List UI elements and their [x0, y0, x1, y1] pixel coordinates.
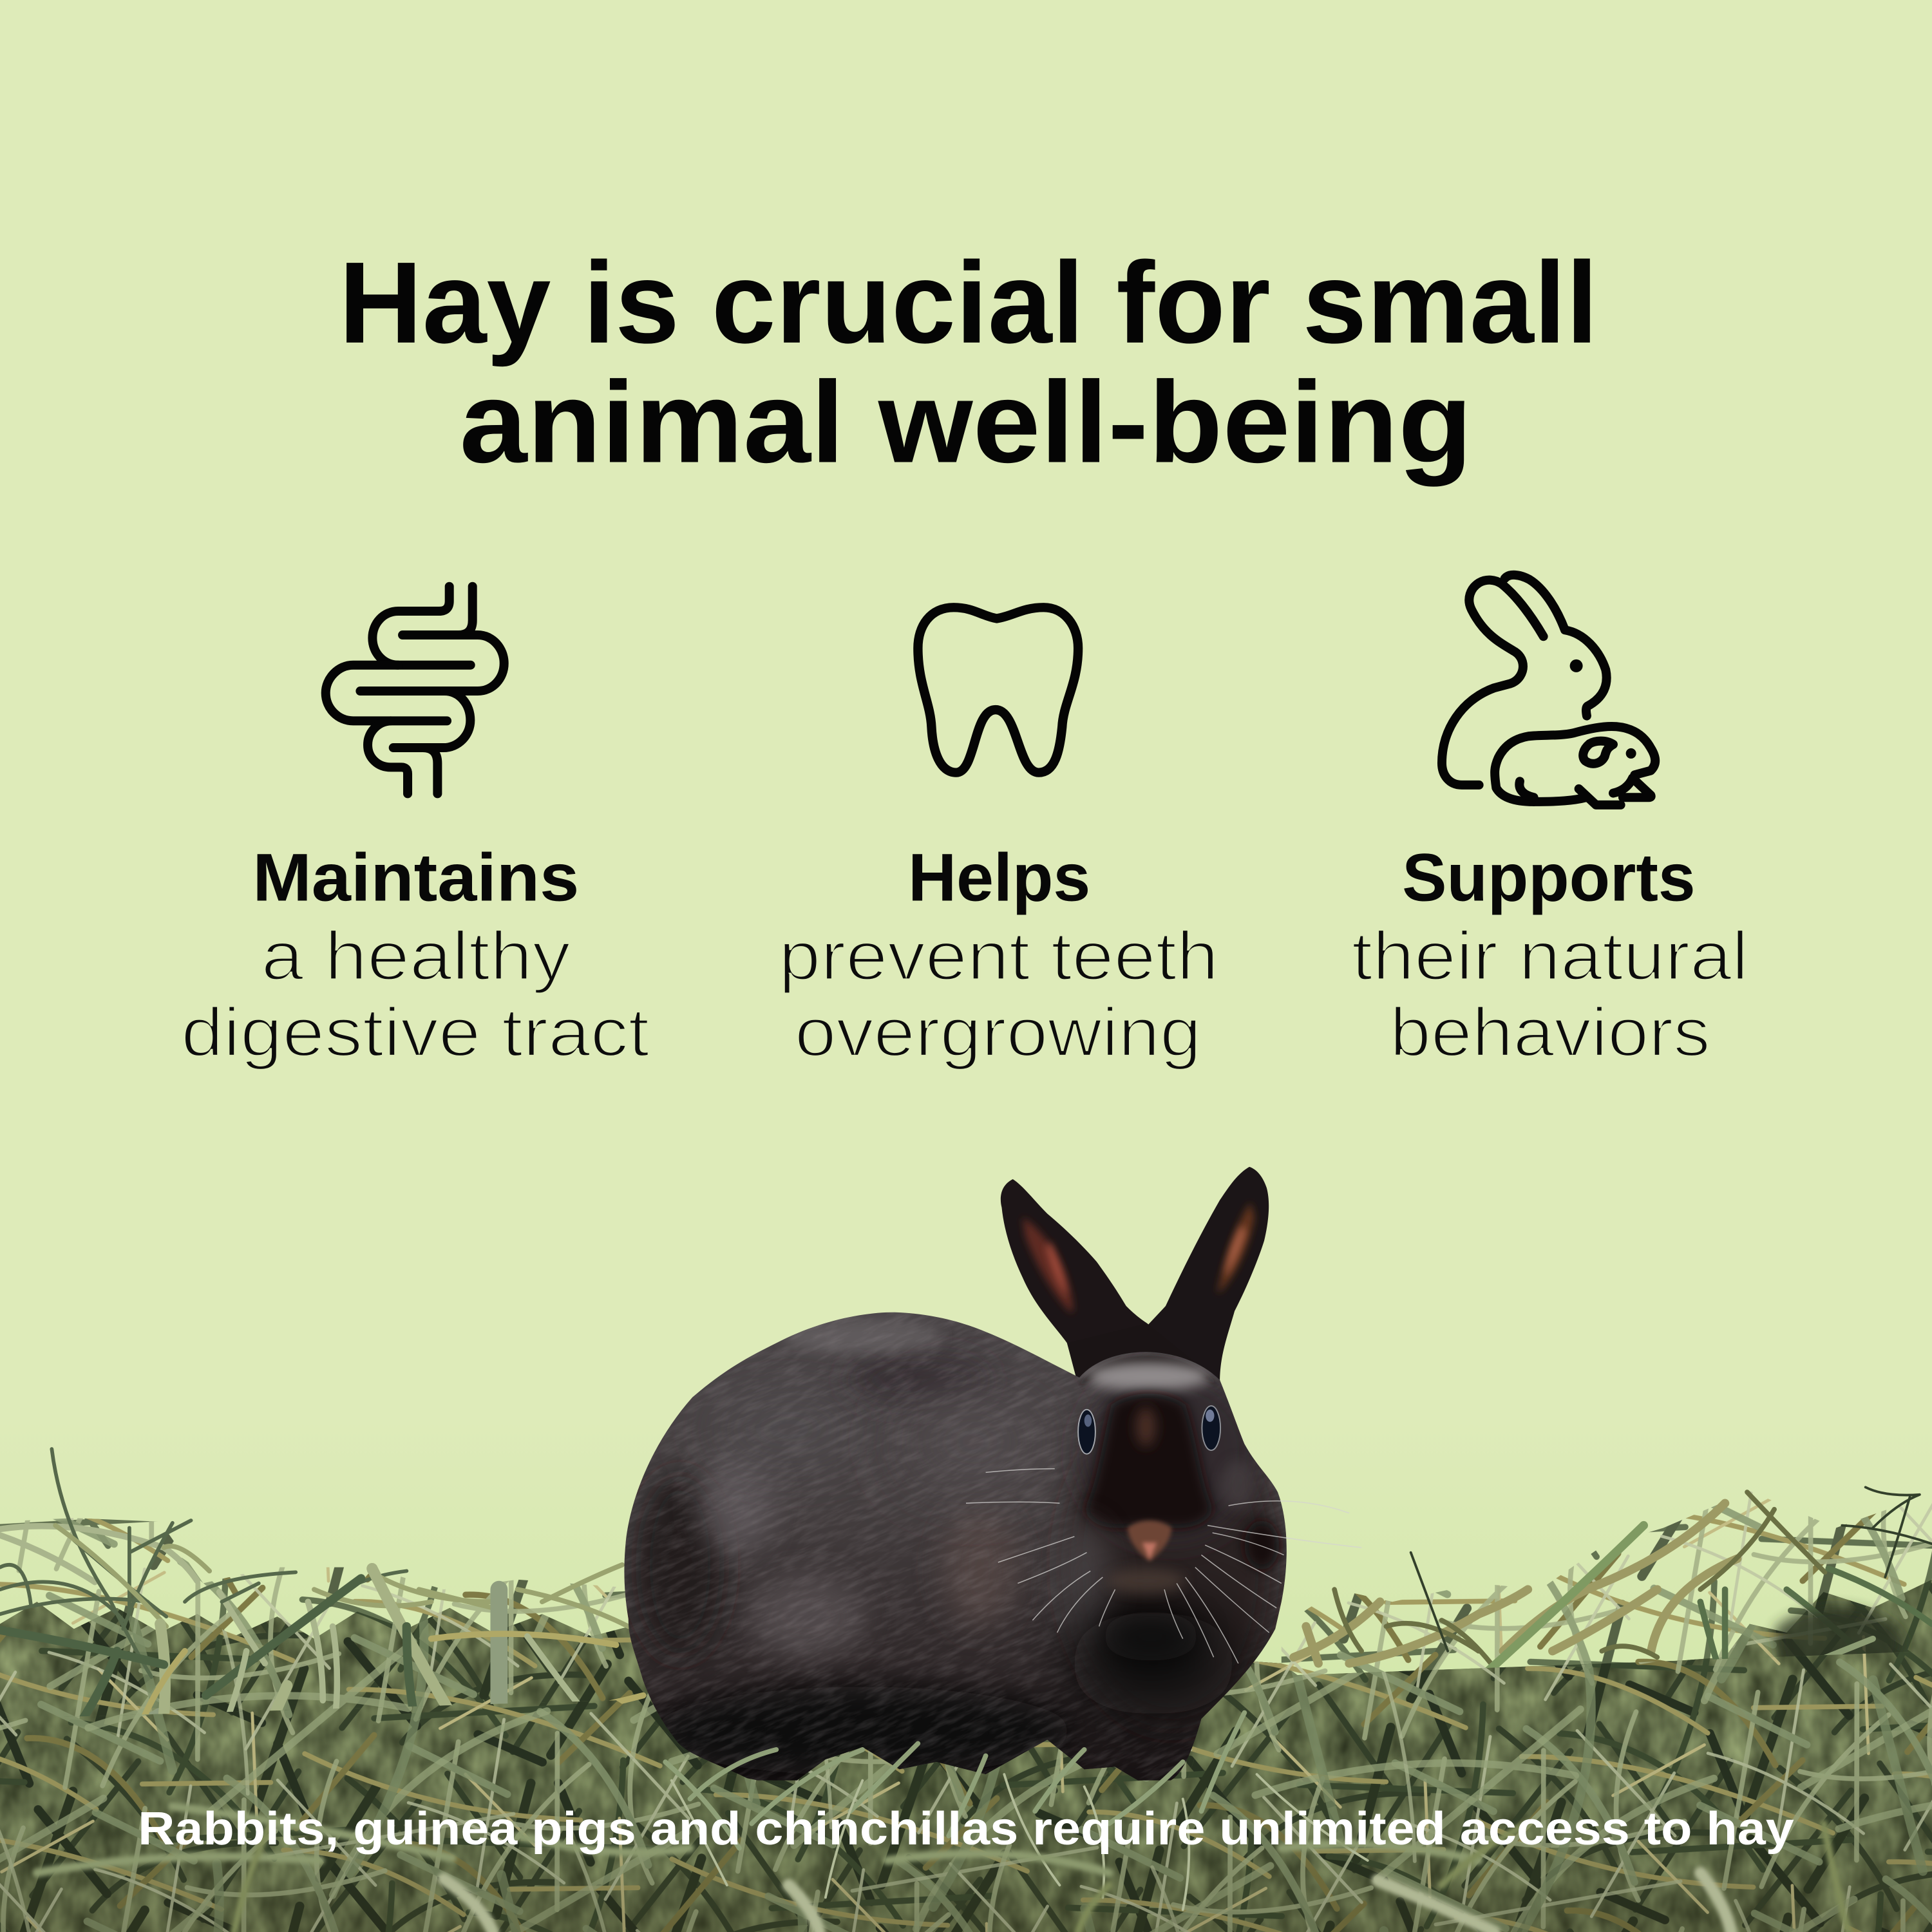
caption: Rabbits, guinea pigs and chinchillas require unlimited access to hay — [138, 1803, 1794, 1855]
hay: back layer — [0, 1447, 1932, 1789]
panel: teeth benefit — [779, 607, 1218, 1071]
left fringe strands — [0, 1526, 323, 1700]
title: Hay is crucial for small — [339, 238, 1598, 368]
text: their natural behaviors: behaviors — [1390, 994, 1710, 1071]
text: a healthy digestive tract — [181, 917, 649, 1071]
rabbit photo — [624, 1167, 1361, 1781]
heading: Supports: Supports — [1402, 840, 1696, 916]
front blades at rabbit feet — [665, 1712, 1244, 1848]
text: a healthy digestive tract: a healthy — [261, 917, 571, 994]
panel: natural behaviors benefit — [1352, 575, 1748, 1071]
left hay blades — [15, 1589, 499, 1811]
background lower glow — [0, 1417, 1932, 1712]
foreground soft blades — [37, 1806, 1848, 1932]
heading: Helps: Helps — [908, 840, 1090, 916]
title: animal well-being — [460, 357, 1472, 487]
panel: digestive tract benefit — [181, 587, 649, 1071]
right dark clump — [1774, 1607, 1904, 1697]
hay dense texture in front — [0, 1513, 1932, 1932]
title — [339, 238, 1598, 487]
text: a healthy digestive tract: digestive tract — [181, 994, 649, 1071]
rabbit nose — [1128, 1520, 1172, 1561]
hay: front layer — [0, 1652, 1932, 1932]
icon: intestine — [326, 587, 504, 793]
right hay blades — [1282, 1639, 1932, 1895]
hay fringe texture — [0, 1491, 1932, 1674]
icon: tooth — [918, 607, 1078, 773]
rabbit head — [1057, 1356, 1279, 1725]
text: their natural behaviors — [1352, 917, 1748, 1071]
text: prevent teeth overgrowing: prevent teeth — [779, 917, 1218, 994]
right torn fringe — [1294, 1503, 1738, 1663]
text: prevent teeth overgrowing: overgrowing — [795, 994, 1201, 1071]
hay dense texture — [0, 1579, 1932, 1789]
icon: rabbit and guinea pig — [1442, 575, 1655, 805]
rabbit body and fur — [624, 1312, 1287, 1781]
text: prevent teeth overgrowing — [779, 917, 1218, 1071]
rabbit whiskers — [966, 1469, 1361, 1663]
rabbit ears — [1001, 1167, 1269, 1390]
rabbit eyes — [1078, 1406, 1220, 1454]
text: their natural behaviors: their natural — [1352, 917, 1748, 994]
heading: Maintains: Maintains — [252, 840, 579, 916]
